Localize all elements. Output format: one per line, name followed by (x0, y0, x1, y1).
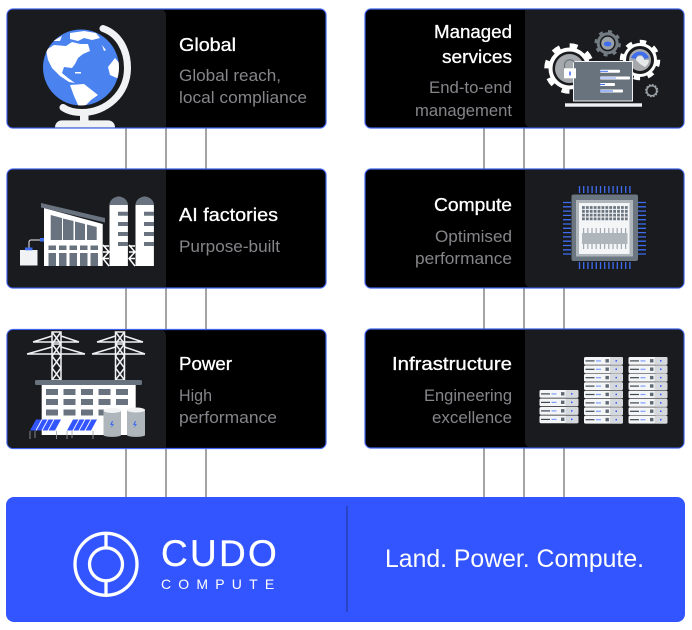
text: Compute description: Optimised (435, 228, 512, 246)
small gear (646, 85, 658, 97)
logo wordmark: CUDO (161, 533, 279, 574)
text: Managed services description: management (415, 102, 512, 120)
panel: AI factories (7, 169, 326, 288)
tagline: Land. Power. Compute. (385, 545, 644, 573)
silo left (110, 197, 128, 266)
heading: Managed services (434, 21, 512, 67)
heading: Infrastructure: Infrastructure (392, 353, 512, 374)
cog ring of lock gear (546, 46, 592, 92)
silo right (136, 197, 154, 266)
rack right (628, 357, 668, 424)
panel: Global (7, 9, 326, 128)
solar panels (30, 420, 97, 439)
text: Power description (179, 387, 277, 427)
icon: power plant with pylons and solar (27, 332, 145, 439)
icon: Cudo logo (75, 533, 137, 595)
heading: AI factories: AI factories (179, 204, 278, 225)
rack middle (584, 357, 623, 424)
panel: Infrastructure (365, 329, 684, 448)
icon: gears and laptop (546, 31, 658, 107)
text: Global description: local compliance (179, 89, 307, 107)
icon: processor chip (563, 186, 646, 269)
heading: Managed services: Managed (434, 21, 512, 42)
icon: globe (43, 28, 128, 127)
icon: server racks (540, 357, 668, 424)
text: Infrastructure description (424, 387, 512, 427)
top gear (596, 31, 620, 55)
text: Managed services description: End-to-end (429, 79, 512, 97)
laptop (565, 62, 642, 107)
tank with pipe (20, 238, 44, 266)
text: Compute description: performance (415, 250, 512, 268)
pylon left (27, 332, 85, 380)
panel: brand banner (6, 497, 685, 622)
panel: Managed services (365, 9, 684, 128)
padlock (564, 60, 576, 78)
right gear (622, 42, 658, 78)
text: Global description: Global reach, (179, 67, 281, 85)
rack short (540, 390, 578, 423)
heading: Compute: Compute (434, 194, 512, 215)
icon: factory with silos (20, 197, 154, 266)
heading: Power: Power (179, 353, 232, 374)
text: Infrastructure description: excellence (432, 409, 512, 427)
storage tanks (104, 408, 145, 437)
logo wordmark: COMPUTE (161, 576, 281, 592)
text: Infrastructure description: Engineering (424, 387, 512, 405)
text: AI factories description: Purpose-built (179, 238, 280, 256)
text: Compute description (415, 228, 512, 268)
panel: Power (7, 330, 326, 448)
panel: Compute (365, 169, 684, 288)
pylon right (92, 332, 145, 380)
text: Global description (179, 67, 307, 107)
trusses (103, 245, 135, 266)
connector lines: left column (126, 128, 206, 497)
heading: Managed services: services (442, 46, 512, 67)
text: Power description: performance (179, 409, 277, 427)
connector lines: right column (484, 128, 564, 497)
text: Power description: High (179, 387, 212, 405)
building (35, 380, 142, 435)
heading: Global: Global (179, 34, 236, 55)
logo wordmark (161, 533, 281, 592)
text: Managed services description (415, 79, 512, 120)
